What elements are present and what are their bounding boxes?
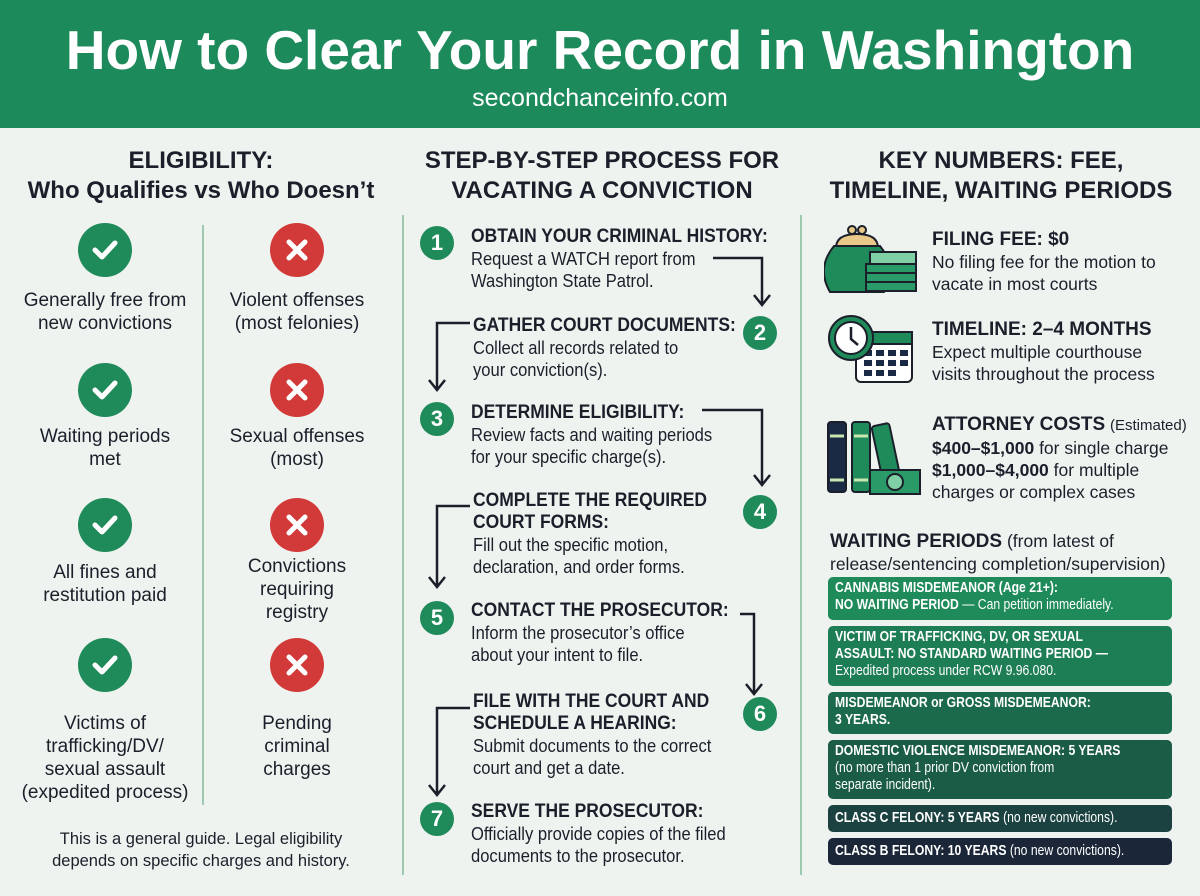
icon: x 3 xyxy=(270,498,324,552)
text: waiting periods met: met xyxy=(89,449,121,470)
step 4: COURT FORMS: xyxy=(473,512,609,533)
step 7 xyxy=(420,801,726,866)
icon: x 1 xyxy=(270,223,324,277)
heading: eligibility: Who Qualifies vs Who Doesn’t xyxy=(28,177,374,204)
step 1: OBTAIN YOUR CRIMINAL HISTORY: xyxy=(471,226,768,247)
box: dv misdemeanor xyxy=(828,740,1172,799)
text: attorney costs: ATTORNEY COSTS (Estimated) xyxy=(932,414,1187,435)
step 4 xyxy=(473,490,777,577)
step 1: Request a WATCH report from xyxy=(471,249,696,269)
box: victim: Expedited process under RCW 9.96.080. xyxy=(835,663,1056,679)
text: attorney costs: $400–$1,000 for single charge xyxy=(932,438,1168,458)
step 3: DETERMINE ELIGIBILITY: xyxy=(471,402,684,423)
text: waiting periods met: Waiting periods xyxy=(40,426,170,447)
text: fines paid: All fines and xyxy=(53,562,157,583)
icon: clock and calendar xyxy=(828,315,913,383)
step 6: 6 xyxy=(754,701,766,726)
text: violent offenses: Violent offenses xyxy=(230,290,364,311)
text: pending charges xyxy=(262,713,332,780)
step 6: SCHEDULE A HEARING: xyxy=(473,713,677,734)
text: timeline xyxy=(932,319,1155,384)
box: victim: ASSAULT: NO STANDARD WAITING PERIOD — xyxy=(835,646,1108,662)
step 2: your conviction(s). xyxy=(473,360,607,380)
step 3: 3 xyxy=(431,406,443,431)
step 7: 7 xyxy=(431,806,443,831)
step 2: Collect all records related to xyxy=(473,338,678,358)
text: waiting periods heading xyxy=(830,531,1166,574)
panel: eligibility xyxy=(22,147,374,870)
text: victims: trafficking/DV/ xyxy=(46,736,164,757)
heading: eligibility: ELIGIBILITY: xyxy=(129,147,273,174)
step 5: CONTACT THE PROSECUTOR: xyxy=(471,600,729,621)
subtitle: secondchanceinfo.com xyxy=(472,84,728,112)
box: misdemeanor xyxy=(828,692,1172,734)
icon: purse and cash xyxy=(824,225,917,293)
header banner xyxy=(0,0,1200,128)
step 6: court and get a date. xyxy=(473,758,625,778)
text: pending charges: charges xyxy=(263,759,331,780)
text: free from new convictions: Generally free from xyxy=(24,290,186,311)
text: attorney costs: $1,000–$4,000 for multiple xyxy=(932,460,1139,480)
text: violent offenses: (most felonies) xyxy=(235,313,359,334)
text: attorney costs xyxy=(932,414,1187,502)
text: filing fee: No filing fee for the motion to xyxy=(932,252,1156,272)
text: pending charges: criminal xyxy=(264,736,330,757)
text: victims: sexual assault xyxy=(45,759,165,780)
step 2: GATHER COURT DOCUMENTS: xyxy=(473,315,736,336)
arrows xyxy=(428,256,771,797)
note: This is a general guide. Legal eligibility xyxy=(60,830,342,848)
heading: key numbers: KEY NUMBERS: FEE, xyxy=(879,147,1123,174)
heading: eligibility xyxy=(28,147,374,204)
text: timeline: Expect multiple courthouse xyxy=(932,342,1142,362)
step 5: 5 xyxy=(431,605,443,630)
text: waiting periods met xyxy=(40,426,170,470)
step 5: about your intent to file. xyxy=(471,645,643,665)
text: victims: Victims of xyxy=(64,713,146,734)
step 6: Submit documents to the correct xyxy=(473,736,711,756)
step 2: 2 xyxy=(754,320,766,345)
step 4: COMPLETE THE REQUIRED xyxy=(473,490,707,511)
text: filing fee: vacate in most courts xyxy=(932,274,1097,294)
note xyxy=(52,830,350,870)
box: victim: VICTIM OF TRAFFICKING, DV, OR SEXUAL xyxy=(835,629,1083,645)
icon: check 3 xyxy=(78,498,132,552)
icon: x 2 xyxy=(270,363,324,417)
icon: check 1 xyxy=(78,223,132,277)
box: dv misdemeanor: (no more than 1 prior DV conviction from xyxy=(835,760,1054,776)
text: registry: requiring xyxy=(260,579,334,600)
text: fines paid xyxy=(43,562,167,606)
box: victim xyxy=(828,626,1172,686)
text: filing fee xyxy=(932,229,1156,294)
text: sexual offenses: Sexual offenses xyxy=(230,426,364,447)
title: How to Clear Your Record in Washington xyxy=(66,19,1134,81)
step 1: 1 xyxy=(431,230,443,255)
box: misdemeanor: MISDEMEANOR or GROSS MISDEMEANOR: xyxy=(835,695,1091,711)
step 3: Review facts and waiting periods xyxy=(471,425,712,445)
text: fines paid: restitution paid xyxy=(43,585,167,606)
text: victims: (expedited process) xyxy=(22,782,188,803)
note: depends on specific charges and history. xyxy=(52,852,350,870)
icon: books and cash xyxy=(827,421,921,495)
box: dv misdemeanor: separate incident). xyxy=(835,777,935,793)
box: dv misdemeanor: DOMESTIC VIOLENCE MISDEMEANOR: 5 YEARS xyxy=(835,743,1120,759)
text: violent offenses xyxy=(230,290,364,334)
text: timeline: TIMELINE: 2–4 MONTHS xyxy=(932,319,1152,340)
text: registry: Convictions xyxy=(248,556,346,577)
box: class c xyxy=(828,805,1172,832)
heading: key numbers xyxy=(830,147,1172,204)
step 5: Inform the prosecutor’s office xyxy=(471,623,685,643)
step 4: 4 xyxy=(754,499,766,524)
text: sexual offenses: (most) xyxy=(270,449,324,470)
box: misdemeanor: 3 YEARS. xyxy=(835,712,890,728)
text: attorney costs: charges or complex cases xyxy=(932,482,1135,502)
text: sexual offenses xyxy=(230,426,364,470)
text: registry xyxy=(248,556,346,623)
text: filing fee: FILING FEE: $0 xyxy=(932,229,1069,250)
text: timeline: visits throughout the process xyxy=(932,364,1155,384)
text: free from new convictions xyxy=(24,290,186,334)
step 2 xyxy=(473,315,777,380)
text: waiting periods heading: WAITING PERIODS (from latest of xyxy=(830,531,1114,552)
box: cannabis: CANNABIS MISDEMEANOR (Age 21+): xyxy=(835,580,1058,596)
box: cannabis xyxy=(828,577,1172,620)
text: registry: registry xyxy=(266,602,328,623)
step 7: Officially provide copies of the filed xyxy=(471,824,726,844)
panel: process xyxy=(420,147,779,866)
box: class c: CLASS C FELONY: 5 YEARS (no new convictions). xyxy=(835,810,1117,826)
box: cannabis: NO WAITING PERIOD — Can petition immediately. xyxy=(835,597,1114,613)
step 1: Washington State Patrol. xyxy=(471,271,654,291)
icon: check 4 xyxy=(78,638,132,692)
step 4: Fill out the specific motion, xyxy=(473,535,668,555)
step 5 xyxy=(420,600,729,665)
heading: process xyxy=(425,147,779,204)
panel: key numbers xyxy=(824,147,1187,574)
icon: check 2 xyxy=(78,363,132,417)
text: waiting periods heading: release/sentencing completion/supervision) xyxy=(830,554,1166,574)
box: class b: CLASS B FELONY: 10 YEARS (no new convictions). xyxy=(835,843,1124,859)
step 7: documents to the prosecutor. xyxy=(471,846,685,866)
step 6 xyxy=(473,691,777,778)
heading: process: STEP-BY-STEP PROCESS FOR xyxy=(425,147,779,174)
text: free from new convictions: new convictions xyxy=(38,313,172,334)
step 7: SERVE THE PROSECUTOR: xyxy=(471,801,703,822)
text: victims xyxy=(22,713,188,803)
step 3 xyxy=(420,402,712,467)
heading: key numbers: TIMELINE, WAITING PERIODS xyxy=(830,177,1172,204)
step 1 xyxy=(420,226,768,291)
heading: process: VACATING A CONVICTION xyxy=(451,177,753,204)
step 6: FILE WITH THE COURT AND xyxy=(473,691,709,712)
icon: x 4 xyxy=(270,638,324,692)
box: class b xyxy=(828,838,1172,865)
step 4: declaration, and order forms. xyxy=(473,557,685,577)
text: pending charges: Pending xyxy=(262,713,332,734)
step 3: for your specific charge(s). xyxy=(471,447,666,467)
